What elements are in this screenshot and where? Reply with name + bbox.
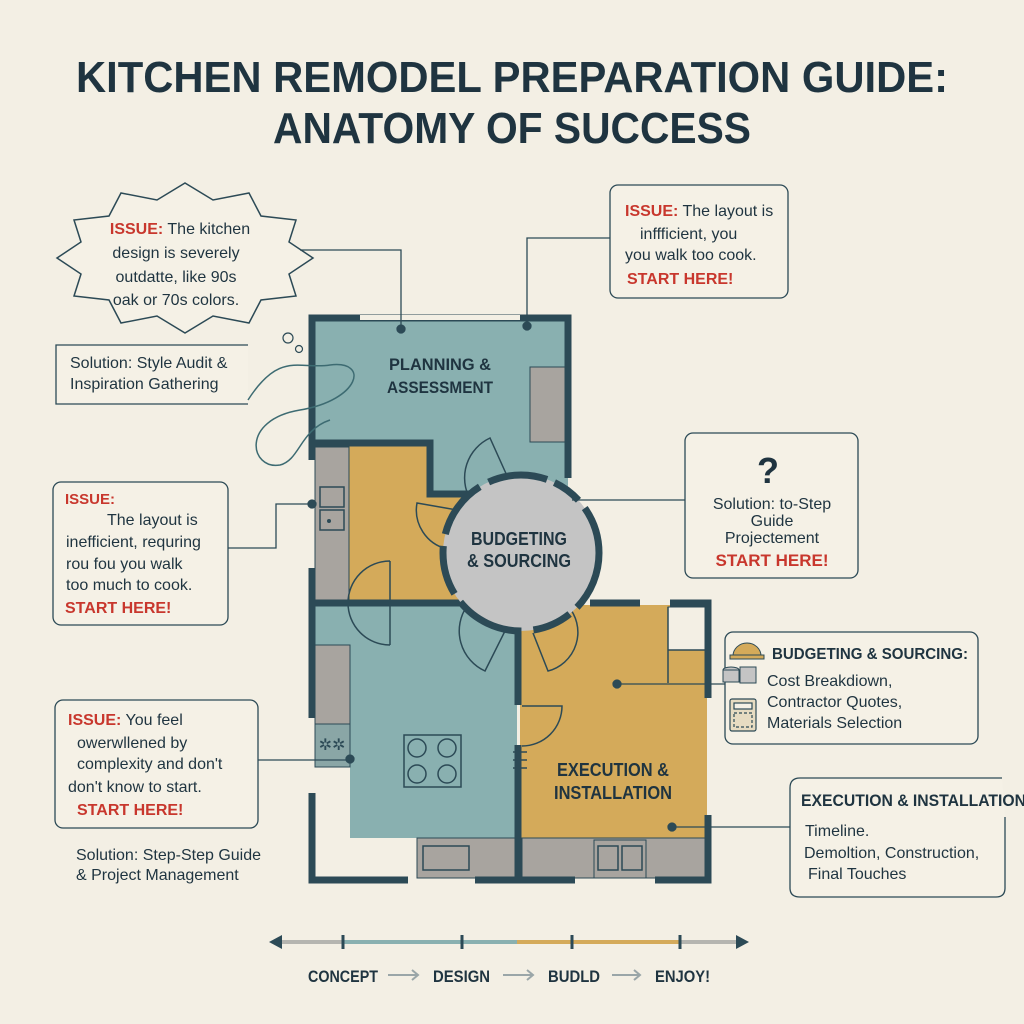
timeline labels: CONCEPT	[308, 967, 379, 986]
room: planning & assessment: ASSESSMENT	[387, 378, 494, 397]
callout: question solution: ?	[757, 450, 779, 491]
callout: budgeting & sourcing: Contractor Quotes,	[767, 694, 902, 711]
timeline labels: DESIGN	[433, 967, 490, 986]
callout: execution & installation: Demoltion, Construction,	[804, 845, 979, 862]
timeline labels: BUDLD	[548, 967, 600, 986]
text: solution step guide	[76, 847, 261, 884]
callout: issue starburst: ISSUE: The kitchen	[110, 221, 250, 238]
callout: left middle issue: ISSUE:	[65, 491, 115, 508]
callout: issue starburst: oak or 70s colors.	[113, 292, 239, 309]
callout: left middle issue: too much to cook.	[66, 577, 192, 594]
callout: solution style audit	[56, 345, 248, 404]
timeline	[269, 935, 749, 986]
icon: hard hat and coins	[723, 643, 764, 683]
doors	[348, 438, 578, 768]
callout: question solution: Solution: to-Step	[713, 496, 831, 513]
room: execution & installation	[520, 605, 707, 878]
callout: top right issue: ISSUE: The layout is	[625, 203, 773, 220]
room: planning & assessment	[312, 318, 568, 500]
callout: budgeting & sourcing: Cost Breakdiown,	[767, 673, 892, 690]
room: execution & installation: EXECUTION &	[557, 760, 669, 780]
callout: left middle issue: inefficient, requring	[66, 534, 201, 551]
callout: left middle issue	[53, 482, 228, 625]
callout: top right issue: inffficient, you	[640, 226, 737, 243]
room: upper yellow	[315, 445, 469, 600]
room: lower blue kitchen: ✲✲	[319, 737, 345, 754]
title	[76, 53, 948, 153]
callout: issue starburst: outdatte, like 90s	[116, 269, 236, 286]
circle: budgeting & sourcing: BUDGETING	[471, 529, 567, 549]
callout: left bottom issue	[55, 700, 258, 828]
connector: question	[572, 499, 685, 501]
text: solution step guide: Solution: Step-Step Guide	[76, 847, 261, 864]
timeline labels: ENJOY!	[655, 967, 710, 986]
callout: execution & installation	[790, 778, 1024, 897]
callout: top right issue: START HERE!	[627, 271, 733, 288]
callout: left bottom issue: ISSUE: You feel	[68, 712, 183, 729]
connector: starburst to planning	[300, 250, 405, 333]
title: ANATOMY OF SUCCESS	[273, 104, 751, 153]
callout: question solution: Projectement	[725, 530, 820, 547]
connector: left bottom	[258, 755, 354, 763]
callout: question solution	[685, 433, 858, 578]
circle: budgeting & sourcing	[443, 475, 599, 631]
walls	[312, 318, 708, 880]
callout: left bottom issue: don't know to start.	[68, 779, 202, 796]
connector: top right	[523, 238, 610, 330]
swirl connector	[248, 365, 354, 465]
icon: calculator	[730, 699, 756, 731]
callout: left bottom issue: complexity and don't	[77, 756, 223, 773]
room: lower blue kitchen	[315, 605, 517, 878]
callout: execution & installation: Final Touches	[808, 866, 906, 883]
floor plan	[312, 315, 708, 880]
circle: budgeting & sourcing: & SOURCING	[467, 551, 571, 571]
callout: issue starburst: design is severely	[112, 245, 240, 262]
icon: cooktop	[404, 735, 461, 787]
callout: budgeting & sourcing: BUDGETING & SOURCING:	[772, 646, 968, 663]
callout: left bottom issue: owerwllened by	[77, 735, 187, 752]
title: KITCHEN REMODEL PREPARATION GUIDE:	[76, 53, 948, 102]
callout: question solution: Guide	[751, 513, 793, 530]
connector: left middle	[228, 500, 316, 548]
callout: budgeting & sourcing	[723, 632, 978, 744]
callout: left middle issue: The layout is	[107, 512, 198, 529]
callout: left middle issue: START HERE!	[65, 600, 171, 617]
room: execution & installation: INSTALLATION	[554, 783, 672, 803]
callout: left middle issue: rou fou you walk	[66, 556, 184, 573]
connector: budgeting	[613, 680, 725, 688]
callout: left bottom issue: START HERE!	[77, 802, 183, 819]
callout: question solution: START HERE!	[715, 551, 829, 570]
timeline labels	[308, 967, 710, 986]
callout: top right issue: you walk too cook.	[625, 247, 757, 264]
callout: solution style audit: Solution: Style Audit &	[70, 355, 228, 372]
callout: budgeting & sourcing: Materials Selection	[767, 715, 902, 732]
connector: execution	[668, 823, 790, 831]
callout: top right issue	[610, 185, 788, 298]
callout: solution style audit: Inspiration Gathering	[70, 376, 219, 393]
callout: execution & installation: Timeline.	[805, 823, 869, 840]
callout: issue starburst	[57, 183, 313, 352]
text: solution step guide: & Project Management	[76, 867, 239, 884]
room: planning & assessment: PLANNING &	[389, 355, 491, 374]
